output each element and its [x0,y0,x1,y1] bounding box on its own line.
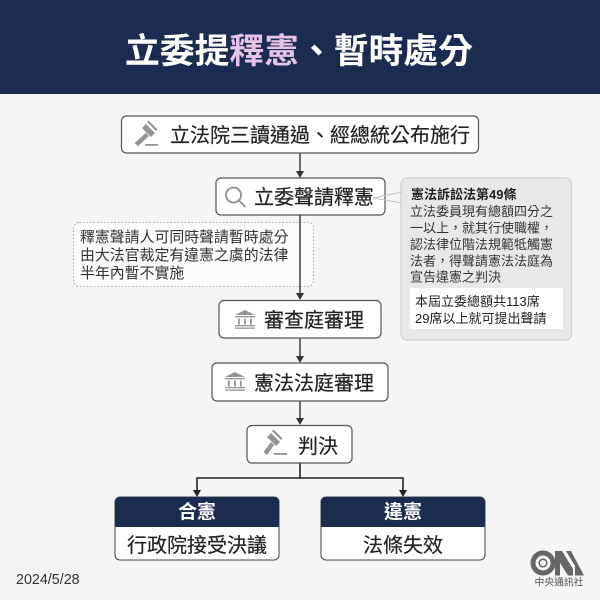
seat count callout [410,288,563,329]
result: 法條失效 [363,534,443,557]
box: constitutional court [212,363,388,401]
outcome: constitutional [115,497,279,560]
connector: law to petition [296,153,304,178]
label: 判決 [298,435,338,458]
article text: 宣告違憲之判決 [410,270,501,284]
box: legislature passes [122,116,478,153]
seat count callout: 29席以上就可提出聲請 [415,311,546,326]
article text: 憲法訴訟法第49條 [411,187,516,202]
icon: gavel [134,120,158,146]
article text: 法者，得聲請憲法法庭為 [410,254,553,268]
icon: court building [235,310,255,329]
connector: review to court to ruling [296,338,304,425]
icon: court building [225,372,245,391]
article text: 一以上，就其行使職權， [410,220,553,236]
outcome: unconstitutional [321,497,485,560]
heading: 合憲 [178,500,216,523]
seat count callout: 本屆立委總額共113席 [415,294,540,309]
label: 審查庭審理 [264,309,364,332]
logo text: 中央通訊社 [535,576,584,588]
note: interim injunction: 釋憲聲請人可同時聲請暫時處分 [80,228,289,246]
box: legislators petition [216,178,385,215]
note: interim injunction [74,222,314,286]
label: 立委聲請釋憲 [254,186,374,209]
article text: 立法委員現有總額四分之 [410,204,553,219]
callout pointer [373,192,402,203]
box: ruling [247,426,352,463]
label: 憲法法庭審理 [254,372,374,395]
icon: gavel [264,430,287,455]
heading: 違憲 [384,500,422,523]
connector: petition to review [296,215,304,300]
connector: branch to outcomes [193,463,407,497]
title: 立委提釋憲、暫時處分 [125,32,473,71]
note: interim injunction: 半年內暫不實施 [80,264,184,282]
panel: Constitutional Court Procedure Act Article 49 [401,178,572,340]
article text: 認法律位階法規範牴觸憲 [410,237,553,252]
note: interim injunction: 由大法官裁定有違憲之虞的法律 [80,246,289,264]
label: 立法院三讀通過、經總統公布施行 [170,124,470,147]
date: 2024/5/28 [16,572,80,588]
box: review panel [219,300,381,338]
logo: CNA [533,551,584,588]
result: 行政院接受決議 [127,534,267,557]
icon: magnifier [226,188,246,207]
header banner [0,0,600,94]
